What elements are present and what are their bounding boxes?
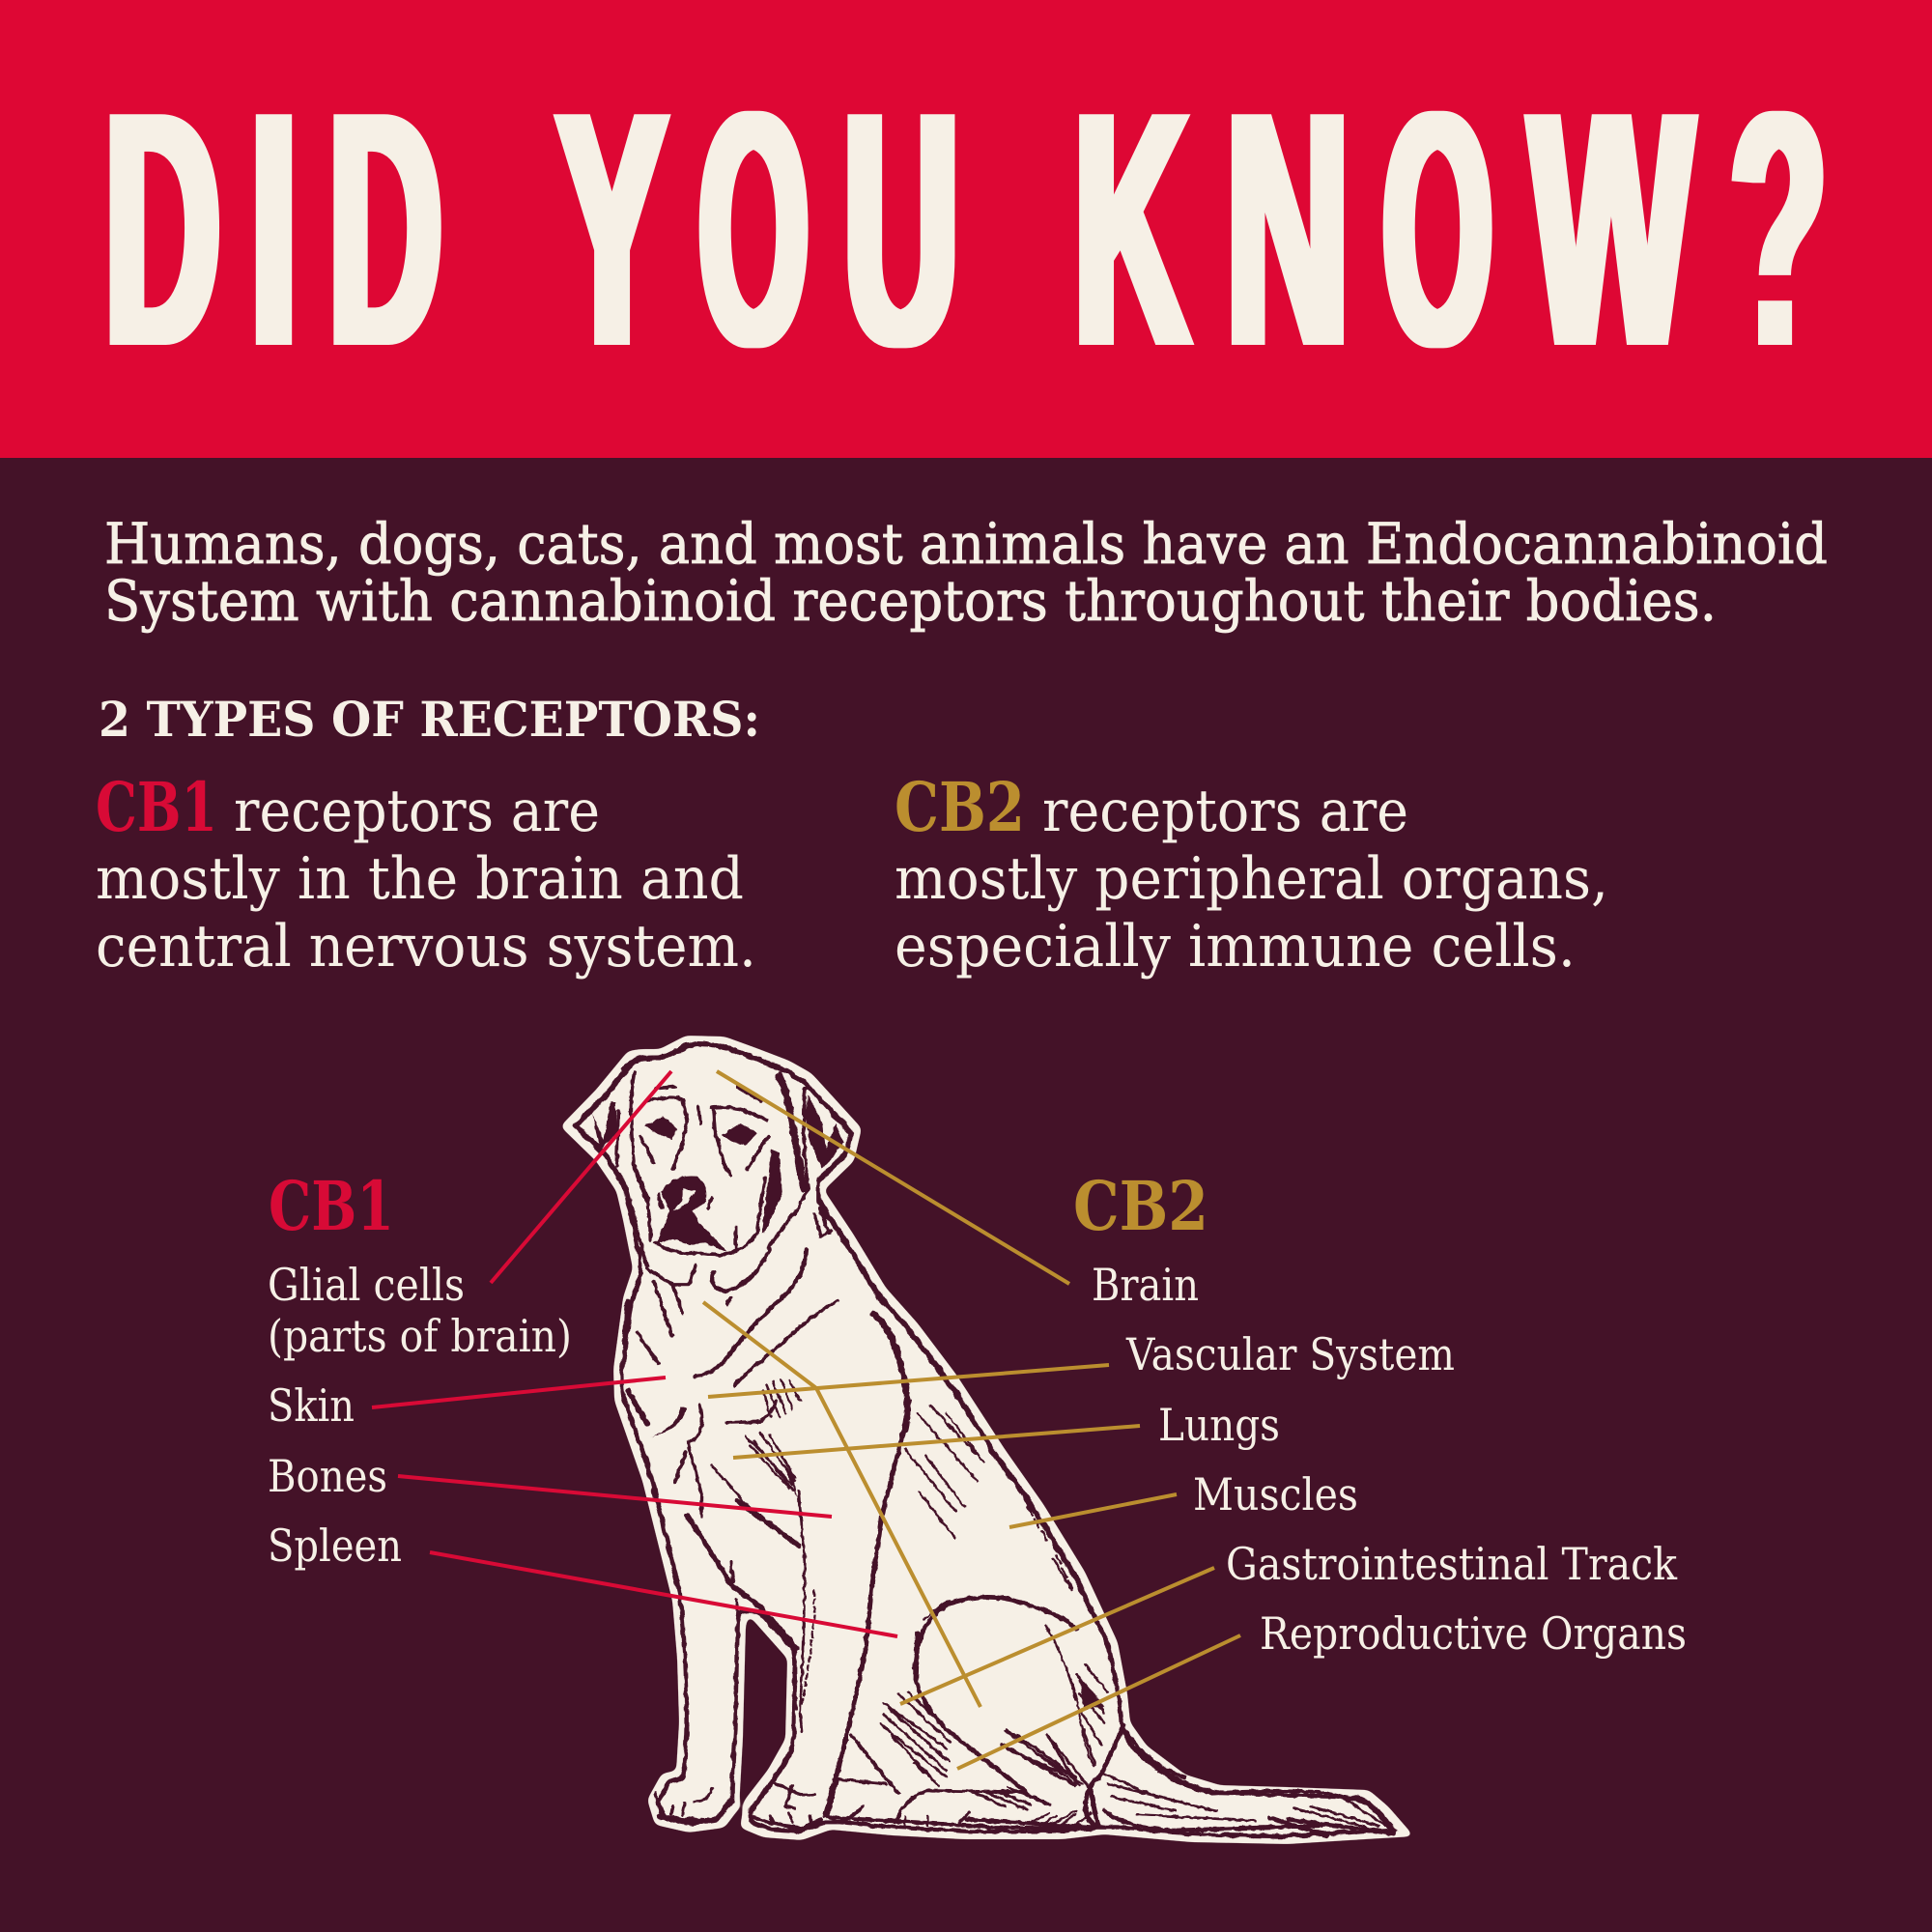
header band [0,0,1932,458]
CB2 organ labels: Gastrointestinal Track [1226,1538,1678,1590]
CB1 description: mostly in the brain and [96,845,744,913]
CB1 description: central nervous system. [96,913,756,980]
CB2 organ labels: Vascular System [1125,1328,1455,1380]
subheading: 2 TYPES OF RECEPTORS: [99,691,760,748]
body and front legs line work [650,1401,1092,1829]
CB1 organ labels: Glial cells [268,1259,465,1311]
CB2 description [895,767,1608,980]
CB2 organ labels [1092,1259,1687,1660]
CB2 description: mostly peripheral organs, [895,845,1608,913]
CB2 organ labels: Reproductive Organs [1260,1607,1687,1660]
title: I [250,42,298,416]
CB1 description [96,767,756,980]
dog illustration [560,1036,1414,1844]
intro text: System with cannabinoid receptors throughout their bodies. [104,568,1717,634]
intro text [104,511,1828,634]
intro text: Humans, dogs, cats, and most animals have an Endocannabinoid [104,511,1828,577]
CB2 description: receptors are [1042,778,1408,845]
CB1 leader lines [372,1071,897,1636]
CB1 organ labels: Bones [268,1450,387,1502]
dog silhouette [560,1036,1414,1844]
title: O [699,42,809,416]
CB1 organ labels [268,1259,572,1572]
CB1 diagram label: CB1 [269,1166,394,1246]
CB2 leader lines [703,1071,1240,1769]
CB2 organ labels: Brain [1092,1259,1199,1311]
title: Y [556,42,668,416]
title: U [844,42,958,416]
dog line work [592,1044,1394,1835]
head line work [592,1044,907,1430]
title: O [1383,42,1492,416]
CB1 organ labels: Skin [268,1379,355,1432]
CB1 description: CB1 [96,767,217,847]
CB1 organ labels: Spleen [268,1520,402,1572]
title [104,42,1827,416]
title: D [104,42,220,416]
CB1 description: receptors are [234,778,600,845]
CB2 diagram label: CB2 [1073,1166,1208,1246]
CB2 description: especially immune cells. [895,913,1576,980]
CB2 description: CB2 [895,767,1025,847]
CB2 organ labels: Lungs [1158,1399,1280,1451]
title: K [1074,42,1190,416]
title: W [1529,42,1695,416]
rump and tail line work [966,1507,1394,1835]
header band: ? [1730,42,1827,416]
CB1 organ labels: (parts of brain) [268,1310,572,1362]
title: N [1226,42,1350,416]
CB2 organ labels: Muscles [1193,1468,1358,1520]
title: D [328,42,442,416]
